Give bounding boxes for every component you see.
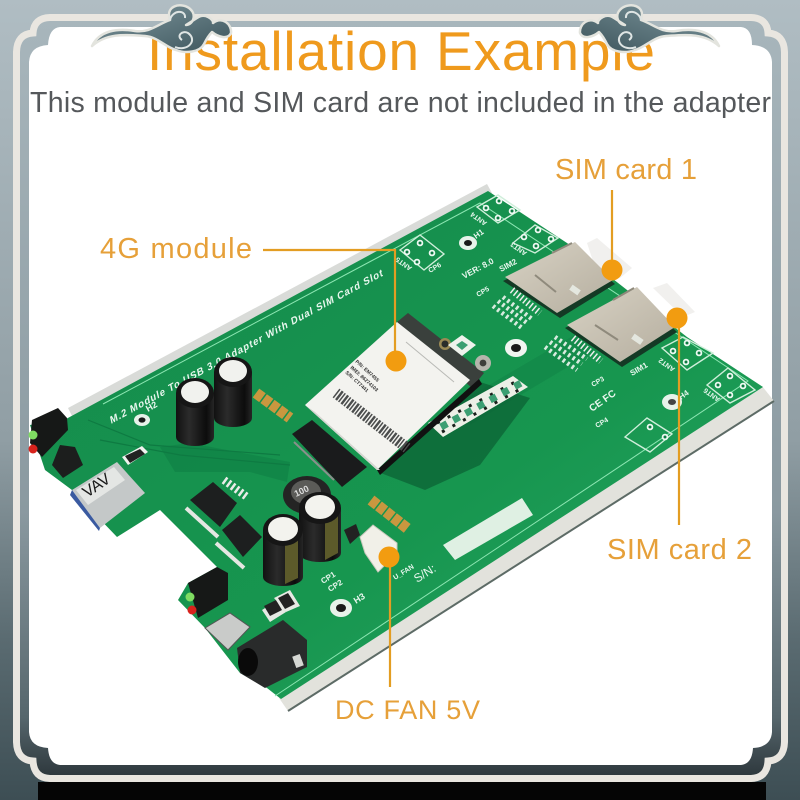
module PCB tail [397, 313, 484, 388]
ornament: right cloud [580, 5, 719, 52]
callout: SIM card 2: SIM card 2 [607, 534, 752, 566]
module label text: IMEI: 86274103 [349, 365, 379, 393]
silkscreen labels: CP3 [590, 376, 606, 389]
silkscreen labels: SIM1 [628, 360, 650, 378]
ornament: left cloud [92, 5, 231, 52]
USB 3.0 port: VAV [80, 470, 114, 501]
silkscreen labels [144, 210, 722, 606]
silkscreen labels: ANT5 [395, 255, 414, 271]
callout: DC FAN 5V [335, 546, 480, 725]
LED block bottom [186, 567, 228, 618]
callout: SIM card 2 [607, 308, 752, 566]
SMD pad arrays [493, 297, 587, 370]
silkscreen labels: ANT6 [703, 386, 722, 402]
module label text: S/N: CT7441 [344, 370, 370, 394]
board: top silver edge [68, 184, 492, 416]
small transistors [122, 446, 360, 622]
silkscreen labels: CE FC [587, 388, 618, 414]
module label text: P/N: EM7455 [354, 359, 380, 384]
silkscreen labels: SIM2 [498, 257, 519, 274]
circuit board photo [28, 184, 774, 711]
4G module [292, 313, 491, 487]
pad strip under module [428, 376, 528, 437]
capacitor A [176, 378, 214, 446]
SIM slot 1 [503, 242, 615, 318]
silkscreen labels: ANT2 [658, 356, 677, 372]
silkscreen labels: CP5 [476, 286, 491, 299]
board: dark edge under strip [288, 401, 774, 711]
silkscreen labels: H3 [352, 591, 367, 606]
module M.2 connector [292, 420, 367, 487]
module shadow [378, 382, 530, 490]
module barcode [336, 393, 407, 448]
silkscreen labels: CP6 [428, 262, 443, 275]
ANT pads [400, 195, 755, 452]
S/N white field [443, 498, 533, 560]
module antenna connector [439, 338, 451, 350]
LED block top-left [28, 408, 83, 478]
USB-C port [205, 613, 250, 650]
module label text [344, 359, 380, 394]
callout: SIM card 1 [555, 154, 697, 280]
silkscreen labels: S/N: [411, 561, 438, 586]
SIM card 2 tail [653, 283, 695, 317]
silkscreen labels: H1 [472, 227, 486, 241]
callout: 4G module [100, 233, 406, 372]
callout: SIM card 1: SIM card 1 [555, 154, 697, 186]
regulator chips [186, 480, 262, 568]
board: signal trace band [160, 443, 290, 482]
SIM slot 2 [565, 287, 677, 367]
board: outline traces [103, 203, 748, 696]
SIM card 1 tail [587, 238, 632, 282]
subtitle: This module and SIM card are not included in the adapter [30, 87, 772, 119]
DC jack [237, 620, 307, 688]
silkscreen labels: VER: 8.0 [460, 256, 496, 281]
silkscreen labels: CP1 [319, 570, 338, 586]
inductor [283, 476, 331, 514]
mounting holes [134, 236, 682, 617]
silkscreen labels: H4 [677, 388, 691, 402]
silkscreen labels: U_FAN [392, 564, 416, 582]
silkscreen labels: ANT3 [510, 240, 529, 256]
silkscreen title: M.2 Module To USB 3.0 Adapter With Dual SIM Card Slot [109, 267, 384, 427]
silkscreen labels: ANT4 [470, 210, 489, 226]
capacitors [176, 357, 341, 586]
inductor: 100 [293, 483, 310, 499]
capacitor C [299, 492, 341, 562]
gold pads [256, 393, 408, 529]
board: bottom silver edge [279, 386, 774, 711]
callout: 4G module: 4G module [100, 233, 252, 265]
silkscreen labels: CP2 [326, 578, 345, 594]
board: green PCB [30, 191, 763, 699]
capacitor B [214, 357, 252, 427]
module label [305, 322, 470, 470]
USB 3.0 port [70, 462, 145, 531]
fan connector [360, 525, 397, 572]
capacitor D [263, 514, 303, 586]
title: Installation Example [147, 20, 655, 82]
callout: DC FAN 5V: DC FAN 5V [335, 695, 480, 725]
silkscreen labels: CP4 [594, 417, 610, 430]
ANT pad holes [405, 199, 745, 439]
silkscreen labels: H2 [144, 399, 159, 414]
